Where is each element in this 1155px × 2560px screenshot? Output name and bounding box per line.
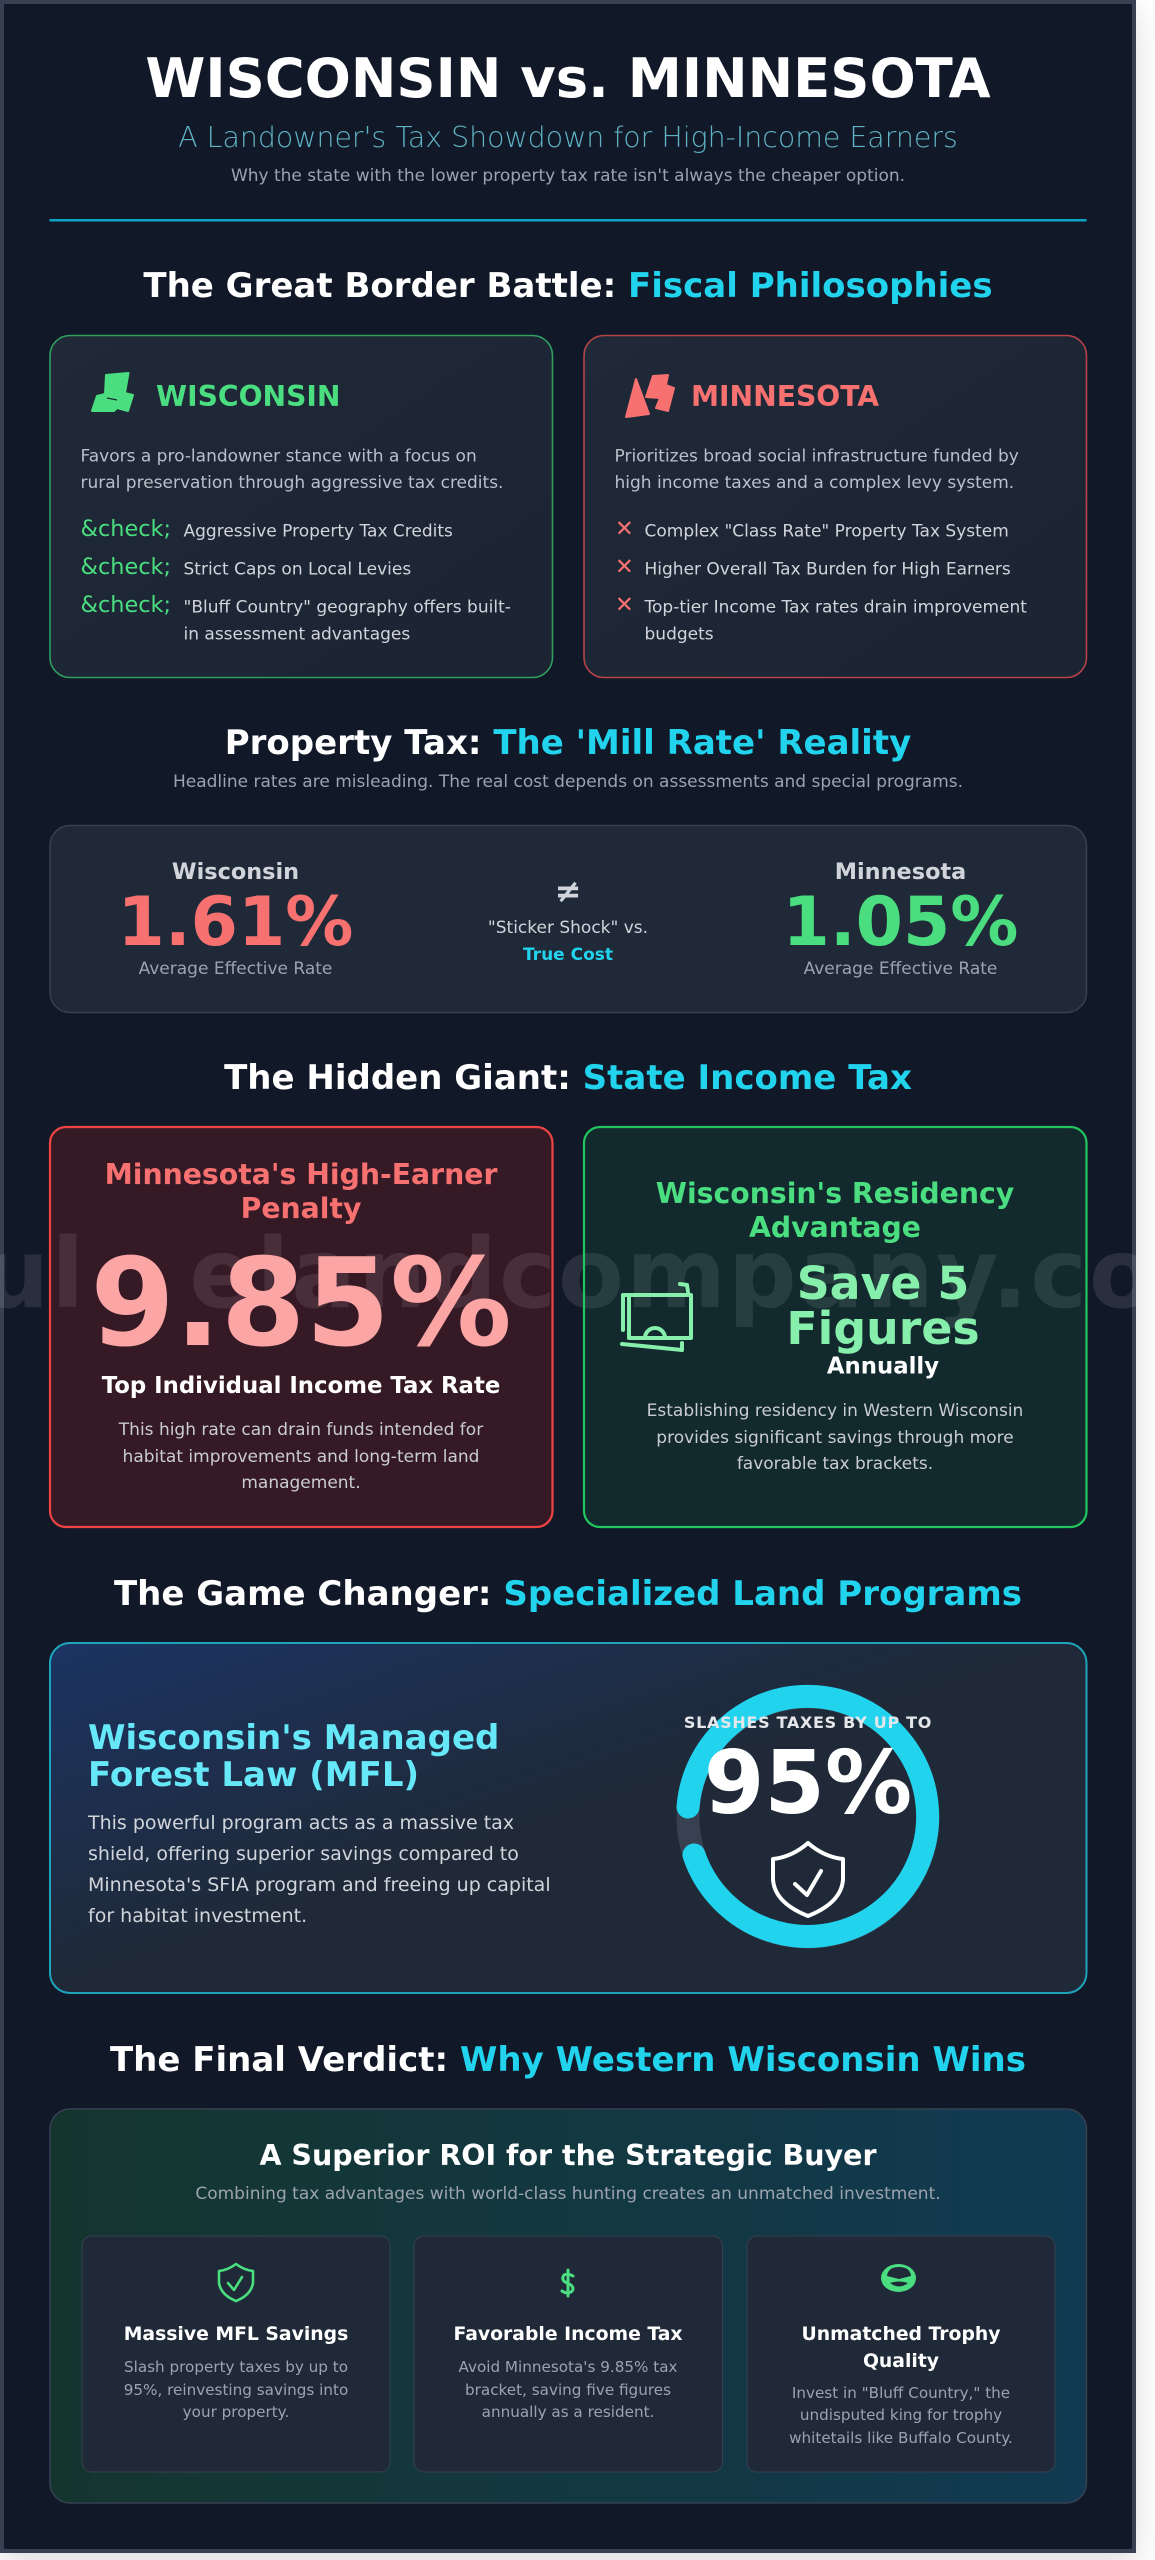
panel: verdict [50,2109,1086,2503]
big stat: 9.85% [90,1232,512,1374]
description: habitat improvements and long-term land [123,1447,479,1467]
panel: property tax comparison [50,826,1086,1012]
stat: Wisconsin rate [118,859,353,979]
stat: Wisconsin rate: Wisconsin [172,859,299,885]
drawbacks list: ✕ [615,554,634,580]
benefits list: Strict Caps on Local Levies [184,560,411,580]
panel: Minnesota philosophy [584,336,1086,678]
description: management. [241,1473,361,1493]
stat: Minnesota rate: Minnesota [835,859,966,885]
benefits list: &check; [80,592,171,618]
card text: undisputed king for trophy [800,2406,1002,2424]
icon: money [622,1284,691,1350]
panel subheading: Combining tax advantages with world-class hunting creates an unmatched investment. [195,2184,941,2204]
card text: Avoid Minnesota's 9.85% tax [458,2358,678,2376]
not-equal comparison: ≠ [555,872,581,910]
state name: WISCONSIN [156,380,340,413]
savings stat: Annually [827,1354,939,1380]
stat: Wisconsin rate: Average Effective Rate [139,959,332,979]
panel heading: Forest Law (MFL) [88,1755,419,1795]
drawbacks list: ✕ [615,592,634,618]
card text: Invest in "Bluff Country," the [792,2384,1010,2402]
description: rural preservation through aggressive tax credits. [80,473,503,493]
benefits list: "Bluff Country" geography offers built- [184,598,511,618]
description: for habitat investment. [88,1905,307,1927]
panel: Minnesota penalty [50,1127,552,1527]
panel heading: Wisconsin's Managed [88,1718,499,1758]
drawbacks list: budgets [644,624,714,644]
icon: shield [219,2264,253,2301]
not-equal comparison: "Sticker Shock" vs. [488,918,648,938]
gauge: 95 percent: SLASHES TAXES BY UP TO [684,1713,932,1732]
description: Favors a pro-landowner stance with a focus on [80,446,477,466]
description: This high rate can drain funds intended for [118,1420,483,1440]
benefits list [80,516,511,644]
description: Minnesota's SFIA program and freeing up capital [88,1874,551,1896]
subheading: property tax: Headline rates are misleading. The real cost depends on assessments and special programs. [173,772,963,792]
benefits list: &check; [80,554,171,580]
icon: Wisconsin state [92,373,133,411]
panel heading: Wisconsin's Residency [656,1177,1014,1210]
description: provides significant savings through more [656,1428,1014,1448]
icon: trophy globe [881,2264,916,2292]
benefits list: &check; [80,516,171,542]
stat: Minnesota rate [783,859,1018,979]
panel heading: Minnesota's High-Earner [105,1158,497,1191]
description: favorable tax brackets. [737,1454,933,1474]
drawbacks list: Top-tier Income Tax rates drain improvement [644,598,1027,618]
card title: Massive MFL Savings [124,2324,348,2345]
not-equal comparison: True Cost [523,945,613,965]
heading: fiscal philosophies: The Great Border Battle: Fiscal Philosophies [143,266,993,306]
benefits list: Aggressive Property Tax Credits [184,522,453,542]
gauge: 95 percent [684,1696,932,1937]
subtitle: A Landowner's Tax Showdown for High-Income Earners [178,121,958,154]
heading: land programs: The Game Changer: Specialized Land Programs [114,1574,1022,1614]
panel: managed forest law [50,1643,1086,1993]
tagline: Why the state with the lower property tax rate isn't always the cheaper option. [231,166,905,186]
drawbacks list: ✕ [615,516,634,542]
savings stat: Save 5 [797,1256,969,1310]
card text: 95%, reinvesting savings into [124,2381,348,2399]
description: high income taxes and a complex levy system. [614,473,1014,493]
card title: Favorable Income Tax [453,2324,683,2345]
card text: annually as a resident. [482,2403,654,2421]
description: Establishing residency in Western Wisconsin [647,1401,1023,1421]
panel heading: Advantage [749,1211,921,1244]
icon: shield check [773,1843,843,1916]
heading: property tax: Property Tax: The 'Mill Rate' Reality [225,723,911,763]
icon: dollar [562,2270,573,2296]
drawbacks list: Higher Overall Tax Burden for High Earners [644,560,1011,580]
stat: Minnesota rate: Average Effective Rate [804,959,997,979]
stat: Wisconsin rate: 1.61% [118,883,353,962]
header [145,47,991,186]
card text: Slash property taxes by up to [124,2358,348,2376]
panel heading: Penalty [241,1192,361,1225]
stat: Minnesota rate: 1.05% [783,883,1018,962]
card text: whitetails like Buffalo County. [789,2429,1013,2447]
card title: Unmatched Trophy [801,2324,1001,2345]
description: shield, offering superior savings compared to [88,1843,519,1865]
drawbacks list [615,516,1027,644]
savings stat [786,1256,980,1380]
panel: Wisconsin advantage [584,1127,1086,1527]
card title: Quality [863,2351,939,2372]
card: trophy quality [747,2236,1055,2472]
description: Prioritizes broad social infrastructure funded by [614,446,1019,466]
drawbacks list: Complex "Class Rate" Property Tax System [644,522,1009,542]
card text: bracket, saving five figures [465,2381,671,2399]
card text: your property. [183,2403,289,2421]
panel: Wisconsin philosophy [50,336,552,678]
description: This powerful program acts as a massive tax [87,1812,514,1834]
heading: verdict: The Final Verdict: Why Western Wisconsin Wins [110,2040,1026,2080]
title: WISCONSIN vs. MINNESOTA [145,47,991,110]
card: income tax [414,2236,722,2472]
benefits list: in assessment advantages [184,624,410,644]
gauge: 95 percent: 95% [704,1732,912,1834]
state name: MINNESOTA [691,380,879,413]
heading: income tax: The Hidden Giant: State Income Tax [224,1058,912,1098]
not-equal comparison [488,872,648,965]
icon: Minnesota state [626,375,674,417]
card: MFL savings [82,2236,390,2472]
panel heading: A Superior ROI for the Strategic Buyer [259,2139,877,2172]
stat label: Top Individual Income Tax Rate [102,1373,500,1399]
savings stat: Figures [786,1301,980,1355]
